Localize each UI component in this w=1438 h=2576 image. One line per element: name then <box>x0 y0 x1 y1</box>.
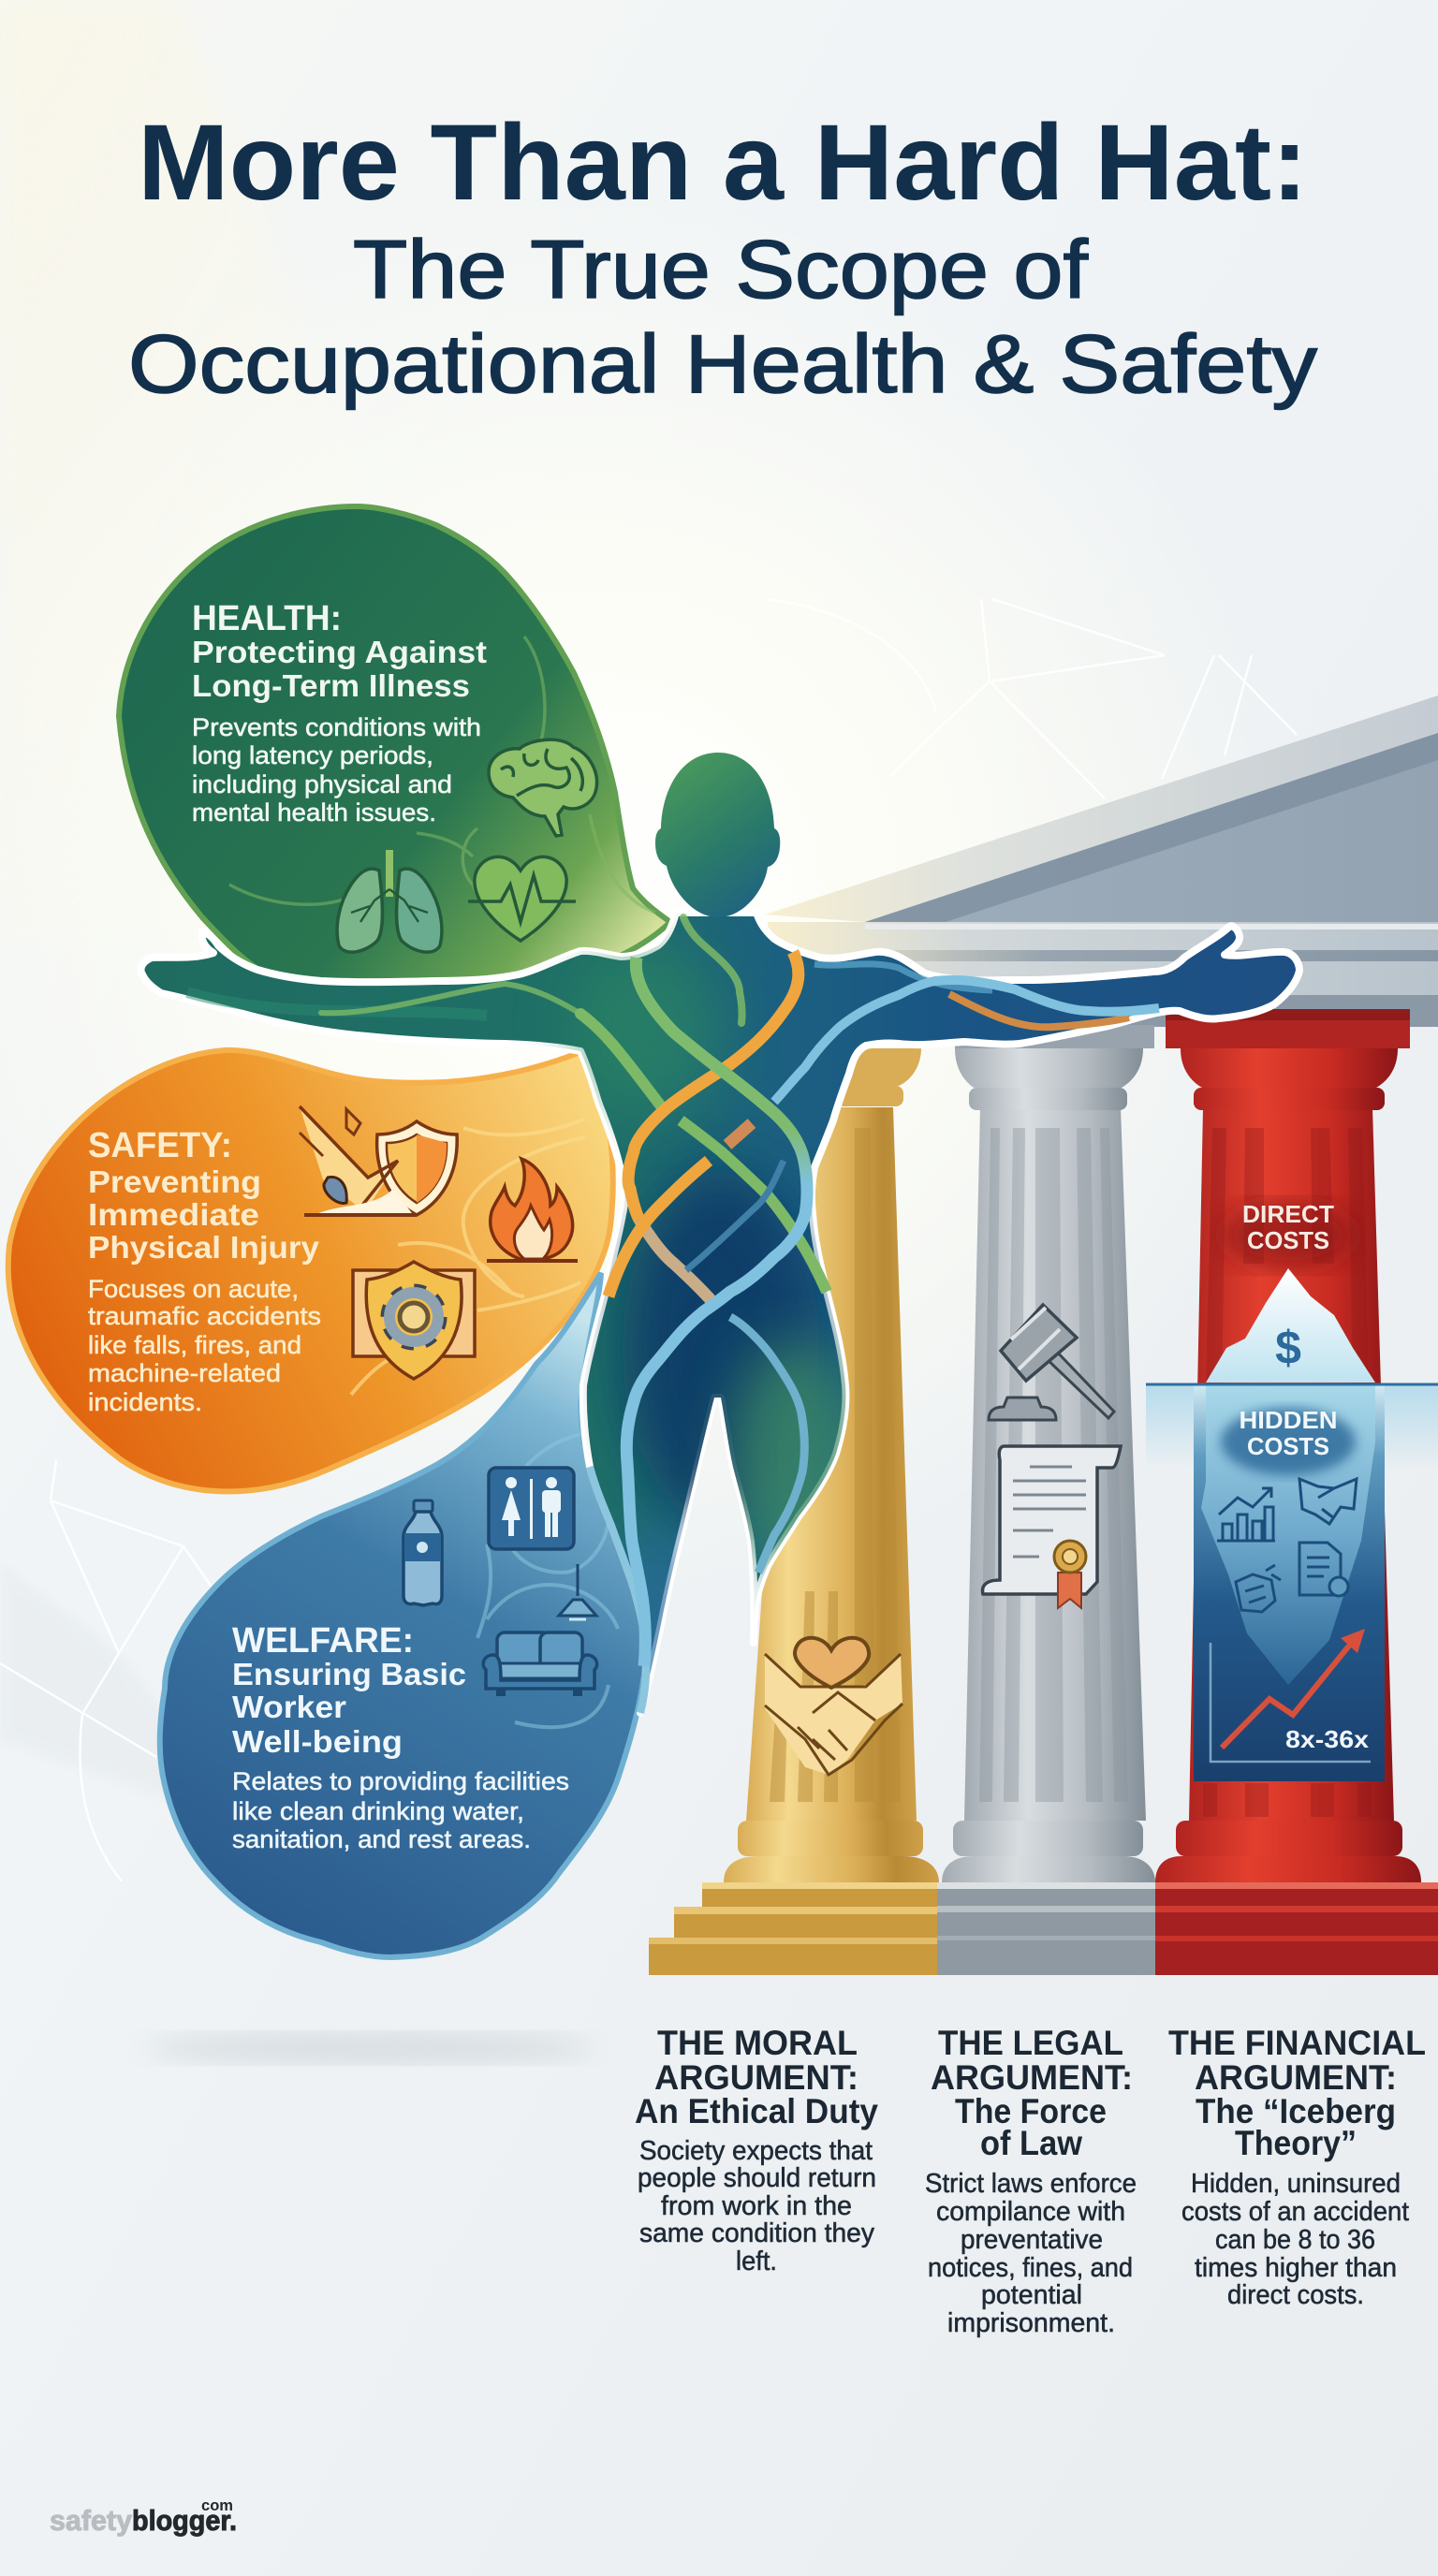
iceberg panel <box>1146 1200 1438 1781</box>
financial description: direct costs. <box>1227 2280 1364 2310</box>
panel: welfare <box>160 1273 646 1957</box>
panel: health <box>119 506 670 993</box>
label hidden costs: COSTS <box>1247 1432 1329 1460</box>
title: The True Scope of <box>353 223 1089 315</box>
icon: hanging lamp <box>559 1564 596 1619</box>
legal description: potential <box>981 2280 1082 2310</box>
legal description: compilance with <box>936 2197 1125 2227</box>
column: red financial pillar <box>1155 1009 1438 1975</box>
text: moral argument <box>635 2024 878 2276</box>
financial heading: ARGUMENT: <box>1195 2058 1397 2097</box>
welfare description: sanitation, and rest areas. <box>232 1825 531 1853</box>
icon: handshake and heart <box>765 1638 902 1775</box>
text: financial argument <box>1168 2024 1426 2310</box>
safety description: traumafic accidents <box>88 1302 321 1330</box>
financial heading: The “Iceberg <box>1196 2092 1396 2130</box>
financial description: costs of an accident <box>1181 2197 1409 2227</box>
legal description: preventative <box>961 2225 1103 2255</box>
icon: sofa <box>483 1632 597 1696</box>
health description: Prevents conditions with <box>192 713 481 741</box>
title: More Than a Hard Hat: <box>138 103 1308 223</box>
welfare heading: Well-being <box>232 1724 403 1759</box>
dollar sign: $ <box>1275 1322 1301 1374</box>
welfare description: like clean drinking water, <box>232 1797 524 1825</box>
bubble shape <box>8 1050 613 1491</box>
legal heading: ARGUMENT: <box>931 2058 1133 2097</box>
icon: gear shield <box>353 1262 475 1379</box>
strand: green crossing <box>681 1120 827 1292</box>
financial description: can be 8 to 36 <box>1215 2225 1375 2255</box>
legal heading: The Force <box>955 2092 1107 2130</box>
label direct costs: DIRECT <box>1242 1200 1334 1228</box>
body colour shading <box>187 945 992 1750</box>
welfare heading: Ensuring Basic <box>232 1657 466 1691</box>
financial description: times higher than <box>1195 2253 1397 2283</box>
legal description: Strict laws enforce <box>925 2169 1137 2199</box>
moral description: same condition they <box>639 2218 874 2248</box>
safety description: Focuses on acute, <box>88 1275 299 1303</box>
bubble shape <box>119 506 670 993</box>
icon: restroom sign <box>489 1468 574 1549</box>
temple roof <box>765 695 1438 1027</box>
title <box>128 103 1317 410</box>
icon: fire <box>487 1159 578 1261</box>
icon: handshake <box>1299 1479 1357 1524</box>
logo: safety <box>50 2504 133 2537</box>
moral description: left. <box>736 2247 777 2276</box>
strand: blue arm <box>774 980 1159 1102</box>
strand: green neck and arm <box>321 917 742 1107</box>
column: silver legal pillar <box>937 1025 1155 1975</box>
strand: green into blue <box>626 958 807 1666</box>
moral description: Society expects that <box>639 2136 873 2166</box>
left leg edge <box>590 1467 646 1713</box>
safety heading: SAFETY: <box>88 1126 232 1165</box>
icon: water bottle <box>404 1500 442 1605</box>
label direct costs: COSTS <box>1247 1226 1329 1254</box>
logo: com <box>201 2496 233 2514</box>
safety description: like falls, fires, and <box>88 1331 301 1359</box>
health heading: HEALTH: <box>192 599 342 638</box>
safety description: machine-related <box>88 1359 281 1387</box>
strand: orange <box>609 952 1129 1303</box>
moral heading: THE MORAL <box>657 2024 858 2062</box>
chart axes <box>1211 1643 1371 1762</box>
panel: safety <box>8 1050 613 1491</box>
icon: brain <box>489 739 597 836</box>
icon: heart with pulse <box>468 856 576 941</box>
waterline <box>1146 1383 1438 1385</box>
flowing accents <box>351 1119 585 1395</box>
icon: crumpled paper <box>1236 1565 1281 1612</box>
financial heading: Theory” <box>1235 2124 1357 2162</box>
flowing accents <box>229 637 655 936</box>
legal heading: of Law <box>980 2124 1082 2162</box>
strand: lower blue <box>730 1317 804 1573</box>
moral description: people should return <box>638 2163 876 2193</box>
title: Occupational Health & Safety <box>128 317 1317 410</box>
financial description: Hidden, uninsured <box>1191 2169 1401 2199</box>
icon: falling object and shield <box>300 1106 457 1215</box>
submerged iceberg <box>1201 1385 1375 1685</box>
legal description: imprisonment. <box>947 2308 1115 2338</box>
iceberg tip <box>1206 1268 1375 1383</box>
financial heading: THE FINANCIAL <box>1168 2024 1426 2062</box>
welfare description: Relates to providing facilities <box>232 1767 569 1795</box>
label hidden costs: HIDDEN <box>1240 1406 1337 1434</box>
welfare heading: WELFARE: <box>232 1621 414 1661</box>
safety heading: Preventing <box>88 1164 261 1199</box>
moral heading: ARGUMENT: <box>654 2058 858 2097</box>
panel under water <box>1194 1385 1385 1781</box>
icon: invoice document <box>1299 1543 1348 1596</box>
trend arrow <box>1222 1629 1365 1748</box>
icon: lungs <box>337 850 442 952</box>
health heading: Protecting Against <box>192 635 487 669</box>
legal heading: THE LEGAL <box>938 2024 1123 2062</box>
flowing accents <box>477 1432 618 1727</box>
icon: gavel <box>989 1305 1114 1420</box>
health description: mental health issues. <box>192 798 436 827</box>
body silhouette <box>140 913 1299 1713</box>
text: legal argument <box>925 2024 1137 2338</box>
legal description: notices, fines, and <box>928 2253 1133 2283</box>
head <box>655 753 780 917</box>
health description: including physical and <box>192 770 452 798</box>
logo: blogger. <box>132 2504 237 2537</box>
icon: legal scroll with seal <box>983 1446 1121 1608</box>
safety description: incidents. <box>88 1388 202 1416</box>
bubble shape <box>160 1273 646 1957</box>
logo <box>50 2496 237 2537</box>
multiplier label: 8x-36x <box>1285 1725 1370 1753</box>
water-line glow <box>1146 1385 1438 1470</box>
safety heading: Immediate <box>88 1197 259 1232</box>
safety heading: Physical Injury <box>88 1230 320 1265</box>
direct cost label glow <box>1223 1202 1354 1269</box>
icon: rising bar chart <box>1217 1488 1275 1541</box>
moral heading: An Ethical Duty <box>635 2092 878 2130</box>
moral description: from work in the <box>661 2191 852 2221</box>
health heading: Long-Term Illness <box>192 668 470 703</box>
health description: long latency periods, <box>192 741 433 769</box>
column: gold moral pillar <box>649 1048 939 1975</box>
ground shadow <box>145 2033 594 2063</box>
strand: faint blue <box>686 1161 784 1270</box>
figure <box>140 753 1299 1750</box>
welfare heading: Worker <box>232 1690 346 1724</box>
